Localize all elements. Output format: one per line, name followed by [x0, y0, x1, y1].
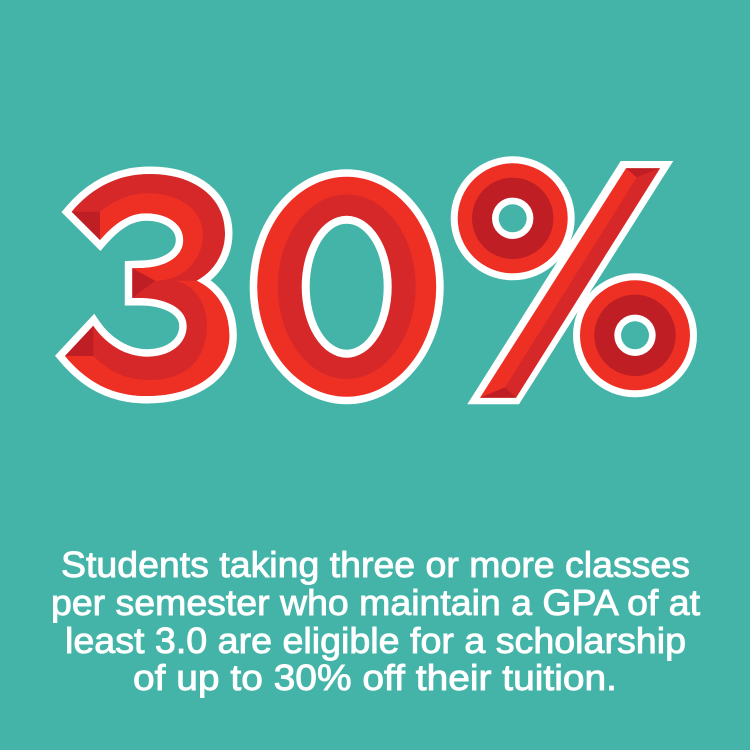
caption text: per semester who maintain a GPA of at: [51, 582, 700, 623]
caption text: [51, 544, 700, 698]
percent sign: [451, 156, 697, 404]
caption text: Students taking three or more classes: [61, 544, 690, 585]
caption text: of up to 30% off their tuition.: [133, 657, 617, 698]
digit 3: [65, 174, 229, 396]
digit 0: [250, 169, 444, 404]
caption text: least 3.0 are eligible for a scholarship: [65, 620, 686, 661]
big number: 30%: [65, 156, 697, 404]
